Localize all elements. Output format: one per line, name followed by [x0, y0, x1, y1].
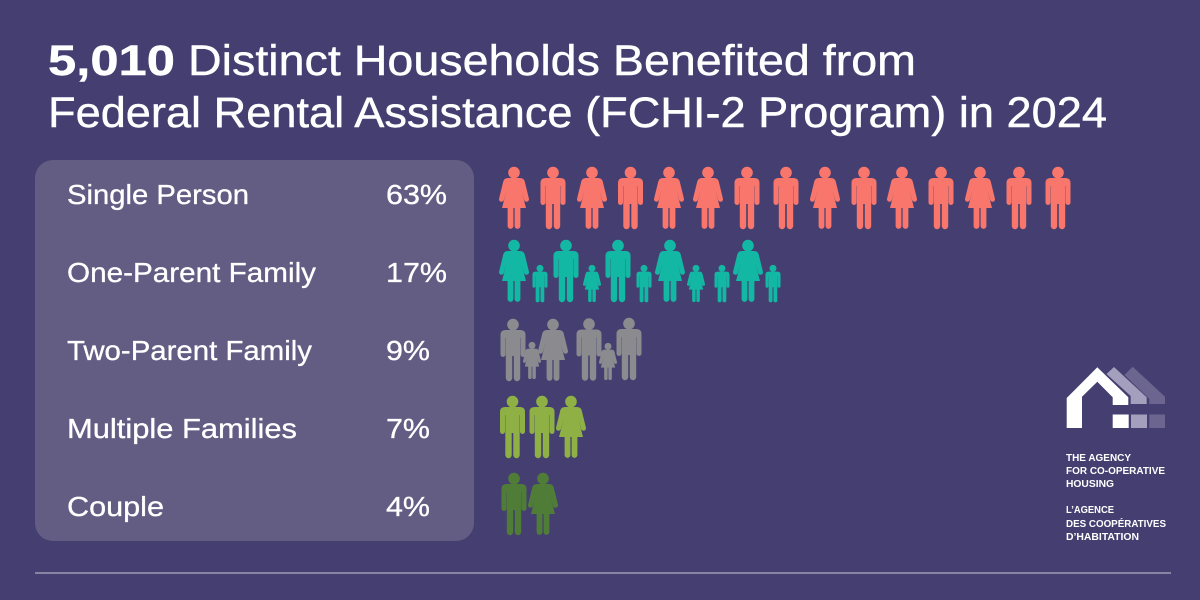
row label: one-parent family: 17% — [386, 257, 447, 288]
logo icon — [1067, 367, 1165, 428]
logo text: DES COOPÉRATIVES — [1066, 517, 1166, 530]
logo text — [1066, 453, 1166, 543]
row label: couple: Couple — [67, 491, 164, 522]
pictogram: couple — [502, 473, 558, 535]
row label: couple — [67, 491, 430, 522]
title: 5,010 — [48, 37, 175, 85]
row label: single person: Single Person — [67, 179, 249, 210]
row label: two-parent family: 9% — [386, 335, 430, 366]
logo text: HOUSING — [1066, 479, 1114, 490]
row label: multiple families: 7% — [386, 413, 430, 444]
logo text: D’HABITATION — [1066, 532, 1139, 543]
panel: household types — [35, 160, 474, 541]
row label: couple: 4% — [386, 491, 430, 522]
pictogram: multiple families — [500, 396, 586, 458]
row label: two-parent family: Two-Parent Family — [67, 335, 312, 366]
title — [48, 37, 1107, 137]
row label: one-parent family: One-Parent Family — [67, 257, 316, 288]
row label: single person: 63% — [386, 179, 447, 210]
row label: single person — [67, 179, 447, 210]
row label: multiple families: Multiple Families — [67, 413, 297, 444]
logo — [1066, 367, 1166, 543]
title: Distinct Households Benefited from — [188, 37, 916, 85]
pictogram: two-parent family — [500, 318, 642, 381]
pictogram: one-parent family — [499, 240, 780, 302]
pictogram: single person — [499, 167, 1070, 229]
logo text: FOR CO-OPERATIVE — [1066, 466, 1165, 477]
row label: two-parent family — [67, 335, 430, 366]
row label: multiple families — [67, 413, 430, 444]
logo text: THE AGENCY — [1066, 453, 1131, 464]
title: Federal Rental Assistance (FCHI-2 Program) in 2024 — [48, 89, 1107, 137]
logo text: L’AGENCE — [1066, 505, 1114, 516]
row label: one-parent family — [67, 257, 447, 288]
